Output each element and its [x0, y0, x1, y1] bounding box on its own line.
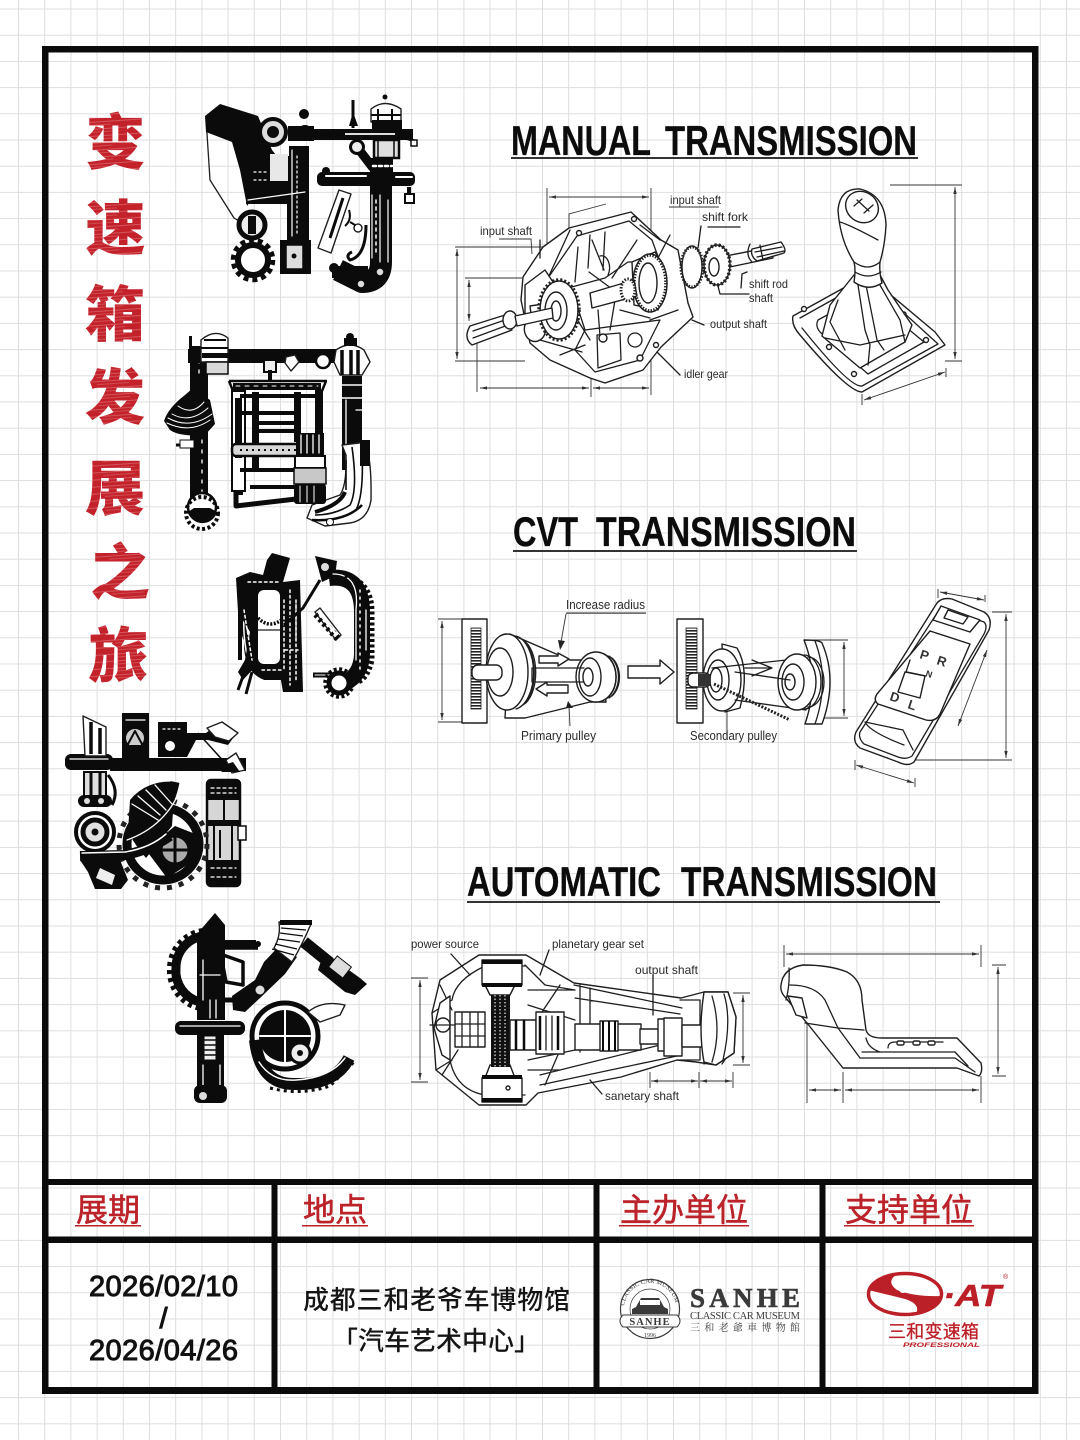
diagram: automatic gearbox: power source	[411, 937, 479, 951]
venue text	[303, 1285, 570, 1356]
icon: manual gear knob and boot	[793, 185, 962, 405]
logo: Sanhe classic car museum: SANHE	[690, 1283, 800, 1313]
vertical red title: 箱	[85, 282, 145, 349]
heading: manual transmission: MANUAL	[511, 117, 651, 164]
heading: cvt transmission	[513, 508, 857, 555]
icon: CVT shifter with PRNDL: N	[924, 668, 934, 680]
mechanical character 轮	[170, 913, 367, 1103]
logo: Sanhe AT: ®	[1003, 1273, 1009, 1281]
icon: automatic shift lever	[781, 945, 1006, 1103]
heading: cvt transmission: CVT	[513, 508, 578, 555]
icon: CVT shifter with PRNDL: P	[918, 647, 931, 664]
logo: Sanhe classic car museum: 1996	[644, 1333, 656, 1339]
exhibition dates	[89, 1271, 238, 1367]
vertical red title	[85, 110, 150, 690]
diagram: secondary pulley CVT	[677, 619, 848, 743]
diagram: manual gearbox: input shaft	[480, 224, 533, 238]
diagram: automatic gearbox: sanetary shaft	[605, 1089, 680, 1103]
diagram: secondary pulley CVT: Secondary pulley	[690, 728, 777, 743]
diagram: automatic gearbox	[411, 937, 750, 1105]
heading: cvt transmission: TRANSMISSION	[596, 508, 856, 555]
logo: Sanhe classic car museum: CLASSIC CAR MUSEUM	[620, 1278, 680, 1306]
diagram: manual gearbox: shaft	[749, 291, 774, 305]
arrow: transition	[628, 660, 674, 684]
table header: supporter: 支持单位	[845, 1192, 973, 1228]
table header: exhibition period: 展期	[76, 1192, 140, 1228]
heading: automatic transmission: TRANSMISSION	[681, 858, 937, 905]
mechanical character 时	[205, 94, 417, 288]
logo: Sanhe classic car museum	[620, 1278, 801, 1340]
logo: Sanhe classic car museum: SANHE	[629, 1317, 671, 1328]
diagram: primary pulley CVT: Increase radius	[566, 597, 645, 612]
vertical red title: 展	[85, 456, 145, 523]
logo: Sanhe AT: ·AT	[943, 1278, 1005, 1313]
diagram: manual gearbox: idler gear	[684, 367, 728, 381]
diagram: automatic gearbox: output shaft	[635, 963, 699, 977]
venue text: 成都三和老爷车博物馆	[303, 1285, 570, 1315]
vertical red title: 发	[85, 365, 145, 432]
logo: Sanhe AT: 三和变速箱	[888, 1322, 979, 1342]
logo: Sanhe classic car museum: 三和老爺車博物館	[690, 1321, 800, 1334]
icon: CVT shifter with PRNDL	[855, 589, 1012, 787]
vertical red title: 变	[86, 110, 146, 177]
icon: CVT shifter with PRNDL: D	[888, 689, 902, 706]
diagram: automatic gearbox: planetary gear set	[552, 937, 645, 951]
logo: Sanhe AT	[868, 1273, 1009, 1349]
diagram: manual gearbox: shift rod	[749, 277, 788, 291]
icon: CVT shifter with PRNDL: L	[906, 697, 918, 713]
venue text: 「汽车艺术中心」	[332, 1326, 540, 1356]
logo: Sanhe AT: PROFESSIONAL	[903, 1342, 980, 1349]
table header: venue: 地点	[303, 1192, 367, 1228]
diagram: primary pulley CVT	[438, 597, 646, 743]
diagram: primary pulley CVT: Primary pulley	[521, 728, 596, 743]
exhibition dates: 2026/04/26	[89, 1335, 238, 1367]
logo: Sanhe classic car museum: CLASSIC CAR MUSEUM	[690, 1311, 801, 1322]
icon: CVT shifter with PRNDL: R	[935, 653, 949, 670]
vertical red title: 之	[90, 540, 150, 607]
heading: automatic transmission	[467, 858, 940, 905]
heading: manual transmission: TRANSMISSION	[665, 117, 917, 164]
diagram: manual gearbox: output shaft	[710, 317, 768, 331]
vertical red title: 速	[86, 196, 146, 263]
diagram: manual gearbox	[455, 188, 788, 397]
diagram: manual gearbox: input shaft	[670, 193, 722, 207]
mechanical character 齿	[65, 713, 246, 889]
heading: manual transmission	[511, 117, 918, 164]
table header: organizer: 主办单位	[620, 1192, 748, 1228]
exhibition dates: 2026/02/10	[89, 1271, 238, 1303]
mechanical character 间	[164, 333, 371, 529]
diagram: manual gearbox: shift fork	[702, 210, 749, 224]
heading: automatic transmission: AUTOMATIC	[467, 858, 661, 905]
mechanical character 的	[236, 553, 372, 697]
exhibition dates: /	[159, 1303, 168, 1335]
vertical red title: 旅	[88, 623, 148, 690]
